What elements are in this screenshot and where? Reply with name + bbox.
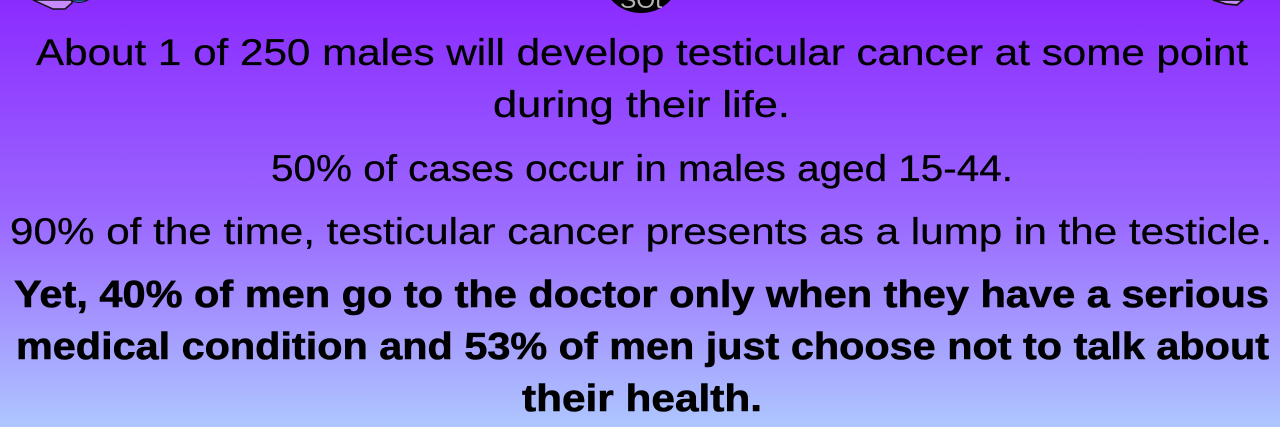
icon: centre cropped logo badge bbox=[603, 0, 679, 14]
text block: incidence statistic: About 1 of 250 males will develop testicular cancer at some point bbox=[36, 31, 1249, 73]
text block: incidence statistic: during their life. bbox=[493, 83, 790, 125]
text block: bold conclusion: their health. bbox=[522, 378, 762, 420]
text block: bold conclusion: medical condition and 53% of men just choose not to talk about bbox=[16, 326, 1269, 368]
text block: symptom statistic: 90% of the time, testicular cancer presents as a lump in the testicle. bbox=[10, 210, 1272, 252]
text block: bold conclusion: Yet, 40% of men go to the doctor only when they have a serious bbox=[14, 274, 1269, 316]
icon: left cropped illustration bbox=[33, 0, 88, 9]
icon: right cropped illustration bbox=[1213, 0, 1243, 5]
text block: age statistic: 50% of cases occur in males aged 15-44. bbox=[271, 147, 1013, 189]
text block: incidence statistic bbox=[36, 31, 1249, 125]
text block: bold conclusion bbox=[14, 274, 1269, 420]
